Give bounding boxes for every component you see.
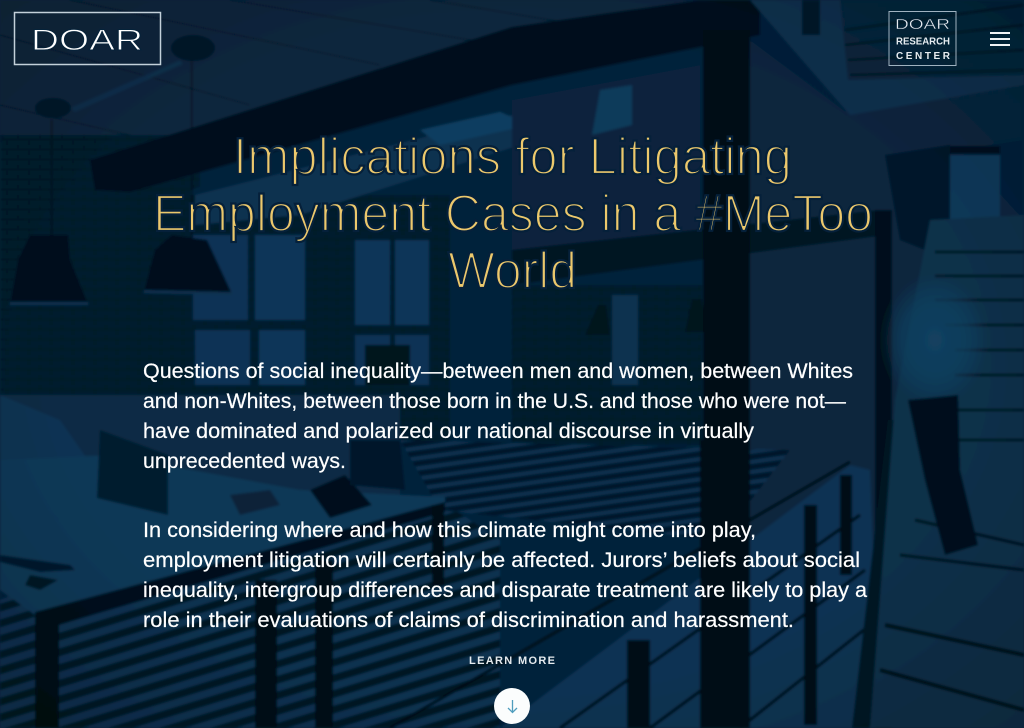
main ceiling beam xyxy=(90,0,760,192)
dark lower beam xyxy=(512,210,885,285)
railing xyxy=(390,462,880,728)
paragraph: employment litigation: role in their evaluations of claims of discrimination and harassment. xyxy=(143,609,794,632)
title xyxy=(153,128,873,300)
central column xyxy=(700,30,900,728)
logo: DOAR Research Center: CENTER xyxy=(896,51,951,62)
blurred person on stairs xyxy=(880,272,990,555)
paragraph: social inequality xyxy=(143,360,853,473)
paragraph: employment litigation: In considering where and how this climate might come into play, xyxy=(143,519,756,542)
windows xyxy=(193,235,638,385)
paragraph: employment litigation: employment litigation will certainly be affected. Jurors’ beliefs about social xyxy=(143,549,860,572)
title: Employment Cases in a #MeToo xyxy=(153,185,873,243)
logo: DOAR Research Center: RESEARCH xyxy=(896,36,950,48)
logo: DOAR xyxy=(14,12,160,64)
paragraph: social inequality: Questions of social inequality—between men and women, between Whites xyxy=(143,360,853,383)
paragraph: employment litigation xyxy=(143,519,867,632)
paragraph: social inequality: and non-Whites, between those born in the U.S. and those who were not— xyxy=(143,390,846,413)
logo: DOAR Research Center xyxy=(889,12,956,66)
logo: DOAR: DOAR xyxy=(31,24,143,57)
paragraph: social inequality: have dominated and polarized our national discourse in virtually xyxy=(143,420,755,443)
ceiling xyxy=(0,0,720,165)
learn more label: LEARN MORE xyxy=(469,655,555,667)
icon: down arrow button xyxy=(494,688,530,724)
paragraph: employment litigation: inequality, intergroup differences and disparate treatment are likely to play a xyxy=(143,579,867,602)
icon: hamburger menu xyxy=(990,32,1010,46)
right upper wall xyxy=(750,0,1024,728)
title: World xyxy=(448,242,577,300)
paragraph: social inequality: unprecedented ways. xyxy=(143,450,346,473)
stairs xyxy=(870,215,1024,728)
logo: DOAR Research Center: DOAR xyxy=(895,16,950,33)
title: Implications for Litigating xyxy=(233,128,792,186)
desk xyxy=(0,395,445,728)
pendant lamps xyxy=(10,60,705,335)
brick wall left xyxy=(0,135,200,435)
office floor stripes xyxy=(0,500,500,728)
back wall xyxy=(190,60,702,450)
